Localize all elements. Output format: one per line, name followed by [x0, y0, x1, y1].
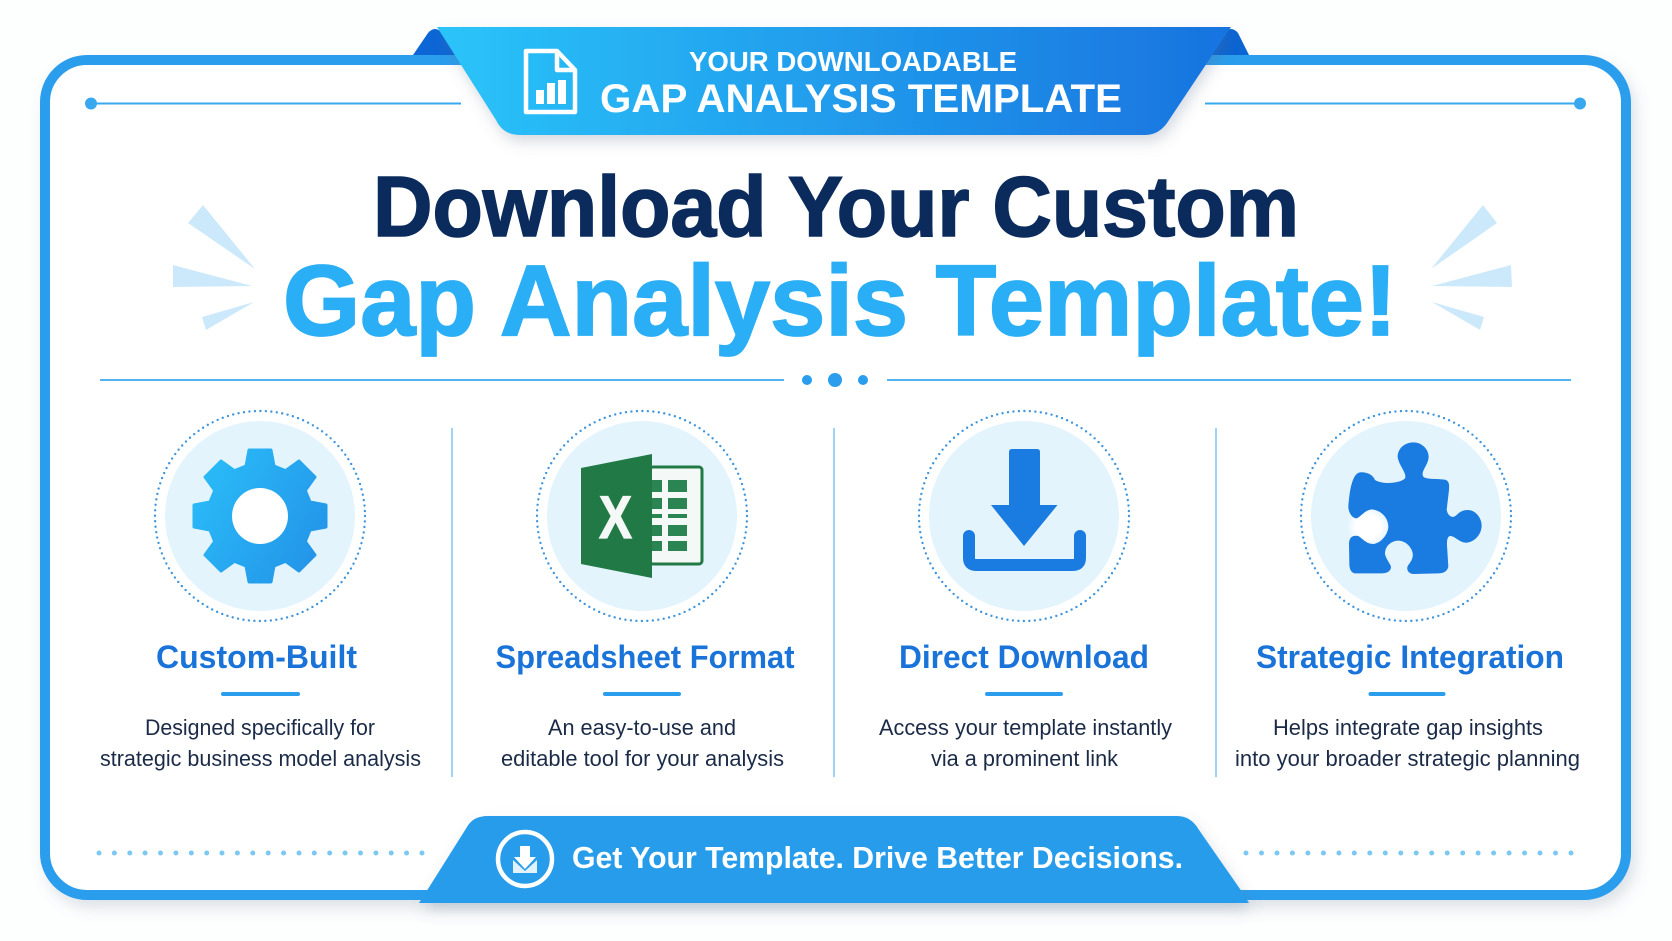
call to action: Get Your Template. Drive Better Decisions. — [572, 840, 1183, 875]
title line 1: Download Your Custom — [373, 160, 1299, 255]
icon: puzzle piece — [1301, 411, 1511, 621]
heading: Custom-Built — [156, 639, 357, 675]
description: Access your template instantly — [879, 715, 1172, 740]
icon: excel: X — [599, 484, 632, 551]
banner shape — [419, 816, 1249, 903]
description: strategic business model analysis — [100, 746, 421, 771]
left rays — [173, 205, 255, 330]
panel: spreadsheet format — [496, 411, 795, 771]
icon: download circle — [498, 832, 552, 886]
icon: gear — [155, 411, 365, 621]
column separators — [451, 428, 1217, 777]
icon: download — [919, 411, 1129, 621]
top banner — [413, 27, 1249, 135]
description: Designed specifically for — [145, 715, 375, 740]
description: into your broader strategic planning — [1235, 746, 1580, 771]
heading: Spreadsheet Format — [496, 639, 795, 675]
underline — [603, 692, 681, 696]
description — [1235, 715, 1580, 771]
banner line 1: YOUR DOWNLOADABLE — [689, 46, 1017, 77]
banner line 2: GAP ANALYSIS TEMPLATE — [600, 77, 1122, 121]
panel: direct download — [879, 411, 1172, 771]
right rays — [1431, 205, 1512, 330]
banner left fold — [413, 29, 458, 55]
description: editable tool for your analysis — [501, 746, 784, 771]
heading: Strategic Integration — [1256, 639, 1564, 675]
top left line with dot — [85, 98, 461, 110]
underline — [1368, 692, 1446, 696]
panel: custom-built — [100, 411, 421, 771]
description — [501, 715, 784, 771]
icon: excel — [537, 411, 747, 621]
underline — [985, 692, 1063, 696]
heading: Direct Download — [899, 639, 1149, 675]
banner right fold — [1207, 29, 1249, 55]
title line 2: Gap Analysis Template! — [283, 245, 1397, 357]
description: Helps integrate gap insights — [1273, 715, 1543, 740]
description — [100, 715, 421, 771]
left dotted line — [96, 850, 424, 856]
divider with dots — [100, 373, 1571, 387]
top right line with dot — [1205, 98, 1586, 110]
description: An easy-to-use and — [548, 715, 736, 740]
icon: spreadsheet file — [526, 51, 575, 112]
bottom banner — [419, 816, 1249, 903]
description — [879, 715, 1172, 771]
panel: strategic integration — [1235, 411, 1580, 771]
underline — [221, 692, 300, 696]
description: via a prominent link — [931, 746, 1119, 771]
right dotted line — [1244, 850, 1574, 856]
title — [283, 160, 1397, 357]
banner ribbon — [437, 27, 1231, 135]
